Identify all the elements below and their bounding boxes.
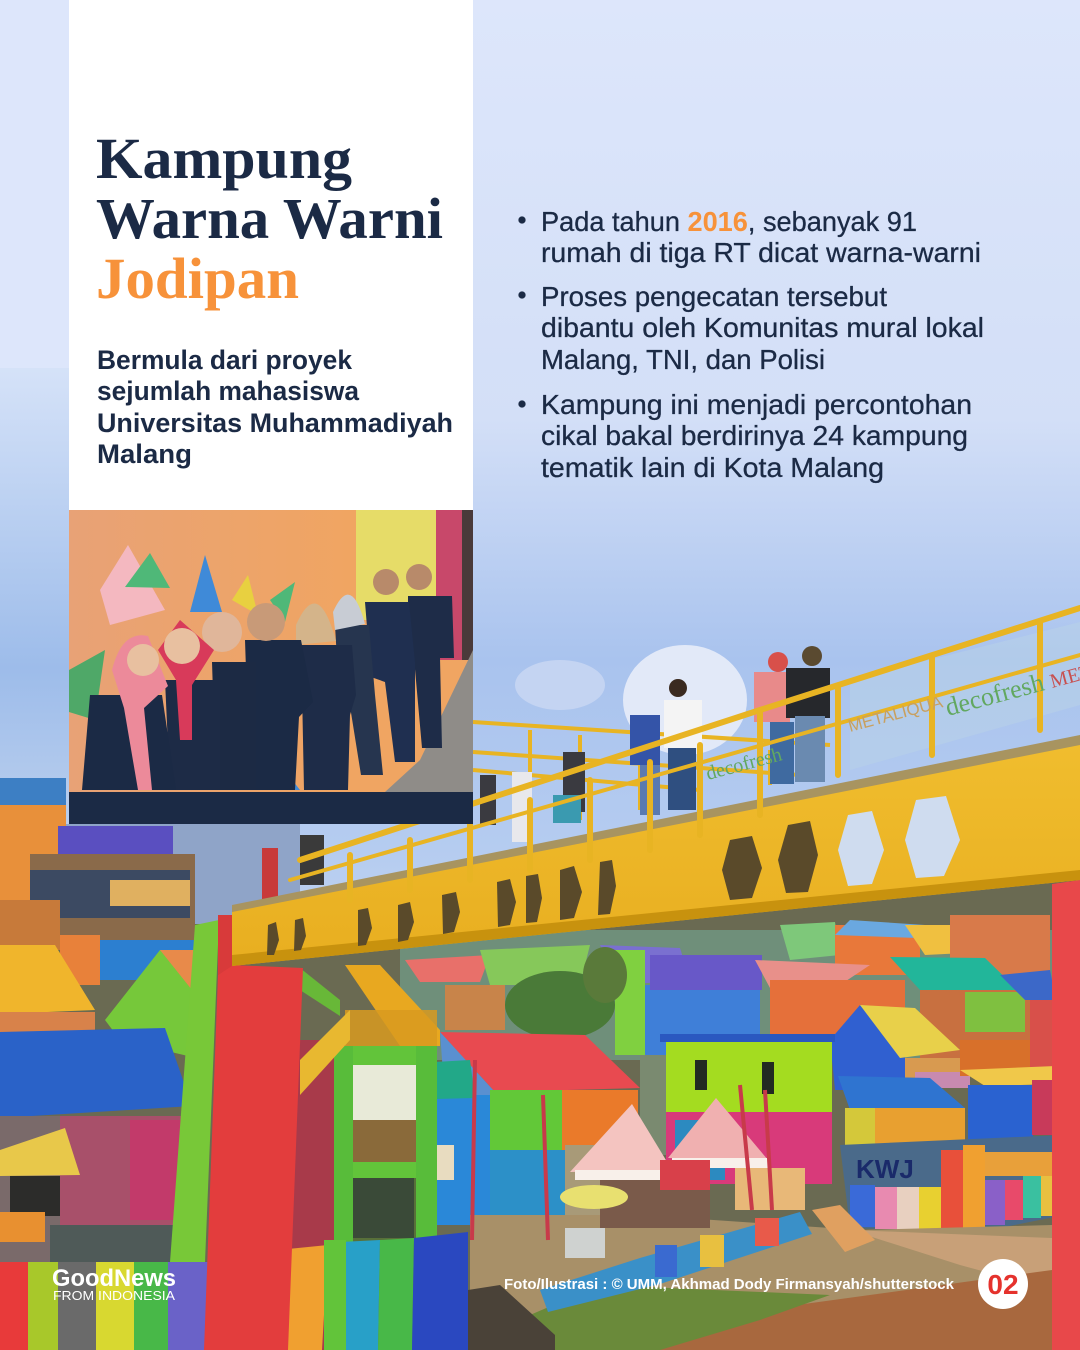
bullet 3: Kampung ini menjadi percontohan bbox=[541, 389, 972, 420]
logo: GoodNews from Indonesia: FROM INDONESIA bbox=[53, 1288, 175, 1303]
page number bbox=[978, 1259, 1028, 1309]
navy bar bbox=[69, 792, 473, 824]
bridge: decofresh bbox=[704, 743, 784, 785]
painted blocks along the ground bbox=[540, 1205, 875, 1312]
panel: white title card bbox=[69, 0, 473, 510]
rainbow stair wall bbox=[278, 1232, 555, 1350]
bullet 2 bbox=[518, 281, 984, 375]
main houses right bbox=[835, 925, 920, 975]
bullet 3: tematik lain di Kota Malang bbox=[541, 452, 884, 483]
photo: students in front of mural bbox=[69, 510, 473, 792]
visitors on the bridge bbox=[262, 646, 830, 902]
subtitle text: sejumlah mahasiswa bbox=[97, 376, 360, 406]
green scaffold stairs bbox=[285, 965, 440, 1350]
subtitle text: Malang bbox=[97, 439, 192, 469]
students bbox=[82, 564, 454, 790]
village scene bbox=[0, 778, 1080, 1350]
far houses background strip bbox=[400, 930, 1080, 1060]
red roof house bbox=[440, 1032, 640, 1092]
red pillar left bbox=[204, 965, 303, 1350]
tents bbox=[560, 1098, 805, 1258]
background houses left bbox=[0, 778, 300, 985]
photo credit: Foto/Ilustrasi : © UMM, Akhmad Dody Firmansyah/shutterstock bbox=[504, 1276, 955, 1293]
bullet 2: Malang, TNI, dan Polisi bbox=[541, 344, 825, 375]
bridge: decofresh bbox=[942, 668, 1047, 722]
blue roof left bbox=[0, 1028, 192, 1118]
title bbox=[96, 126, 443, 311]
subtitle text: Universitas Muhammadiyah bbox=[97, 408, 453, 438]
bullet 3: cikal bakal berdirinya 24 kampung bbox=[541, 420, 968, 451]
orange house with blue roof bbox=[838, 1076, 965, 1110]
lime green house bbox=[660, 1034, 835, 1042]
ground bbox=[470, 1215, 1052, 1350]
subtitle text: Bermula dari proyek bbox=[97, 345, 353, 375]
scene base bbox=[0, 860, 1080, 1350]
title: Jodipan bbox=[96, 246, 299, 311]
bridge bbox=[232, 608, 1080, 966]
sky background bbox=[0, 0, 1080, 1000]
red pillar right bbox=[1052, 880, 1080, 1350]
girder body bbox=[232, 745, 1080, 966]
flag poles bbox=[472, 1060, 772, 1240]
title: Kampung bbox=[96, 126, 352, 191]
bullet 2: Proses pengecatan tersebut bbox=[541, 281, 887, 312]
page number: 02 bbox=[987, 1269, 1019, 1300]
green house bbox=[105, 950, 215, 1060]
bullet 2: dibantu oleh Komunitas mural lokal bbox=[541, 312, 984, 343]
yellow roof left bbox=[0, 945, 95, 1014]
hexagon holes bbox=[267, 821, 818, 955]
rainbow wall bbox=[0, 1262, 210, 1350]
blue house right mid bbox=[830, 1005, 905, 1090]
bridge: METALIQUA bbox=[846, 692, 945, 736]
title: Warna Warni bbox=[96, 186, 443, 251]
subtitle text bbox=[97, 345, 453, 469]
deck bbox=[232, 735, 1080, 915]
bullet 1 bbox=[518, 206, 981, 268]
back railing bbox=[473, 722, 830, 830]
front railing panels bbox=[850, 622, 1080, 770]
blue side house bbox=[430, 1095, 490, 1225]
bullet 1: rumah di tiga RT dicat warna-warni bbox=[541, 237, 981, 268]
front railing bbox=[290, 608, 1080, 900]
logo: GoodNews from Indonesia: GoodNews bbox=[52, 1265, 176, 1292]
mural wall right bbox=[840, 1135, 1064, 1234]
bullet 3 bbox=[518, 389, 972, 483]
trees bbox=[505, 971, 615, 1039]
green column and frame bbox=[170, 920, 219, 1262]
bullet 1: Pada tahun 2016, sebanyak 91 bbox=[541, 206, 917, 237]
bullet list bbox=[518, 206, 984, 483]
mural wall right: KWJ bbox=[856, 1154, 914, 1184]
